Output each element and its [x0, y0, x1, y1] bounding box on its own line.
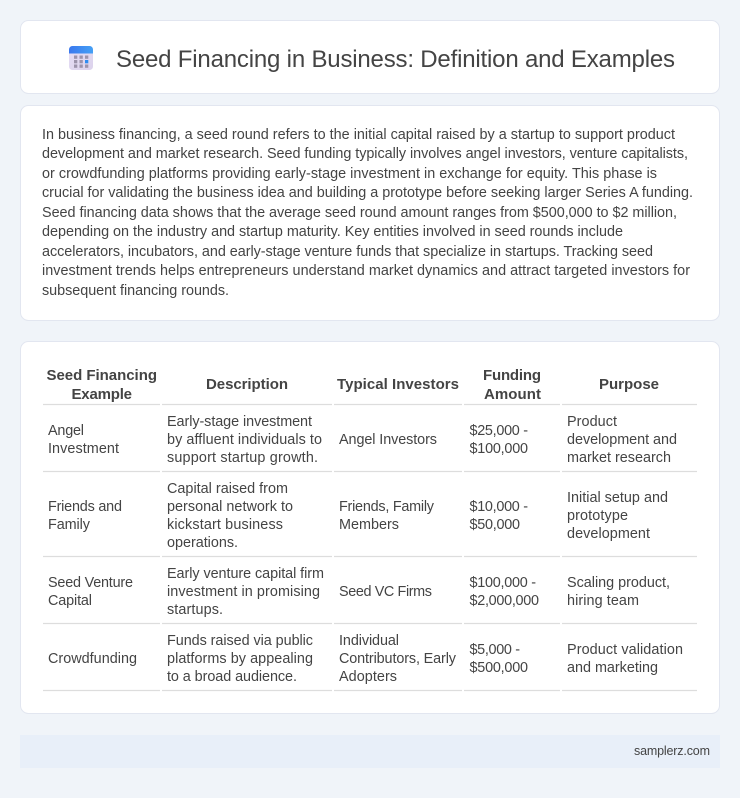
- table row: Angel Investment: $25,000 -: [470, 423, 528, 439]
- table row: Seed Venture Capital: Seed VC Firms: [339, 584, 432, 600]
- text block: introduction paragraph: or crowdfunding platforms providing early-stage investment in exchange for equity. This phase is: [42, 166, 657, 182]
- table row: Angel Investment: Early-stage investment: [167, 414, 312, 430]
- table row: Friends and Family: Capital raised from: [167, 481, 288, 497]
- footer source text: samplerz.com: [634, 744, 710, 758]
- table row: Friends and Family: Members: [339, 517, 399, 533]
- table row: Friends and Family: Friends and: [48, 499, 122, 515]
- table row: Friends and Family: personal network to: [167, 499, 293, 515]
- panel: header: [20, 20, 720, 94]
- table row: Friends and Family: kickstart business: [167, 517, 283, 533]
- table row: Crowdfunding: to a broad audience.: [167, 669, 297, 685]
- table header row: Amount: [484, 386, 541, 403]
- table row: Seed Venture Capital: hiring team: [567, 593, 639, 609]
- table row: Seed Venture Capital: startups.: [167, 602, 223, 618]
- table header row: Seed Financing: [46, 367, 157, 384]
- table row: Angel Investment: support startup growth.: [167, 450, 318, 466]
- table header row: Description: [206, 376, 288, 393]
- table row: Seed Venture Capital: $2,000,000: [470, 593, 539, 609]
- table row: Seed Venture Capital: Scaling product,: [567, 575, 670, 591]
- table row: Crowdfunding: $5,000 -: [470, 642, 520, 658]
- table row: Seed Venture Capital: $100,000 -: [470, 575, 536, 591]
- table row: Angel Investment: Product: [567, 414, 617, 430]
- text block: introduction paragraph: investment trends helps entrepreneurs understand market dynamics and attract targeted investors for: [42, 263, 690, 279]
- table row: Crowdfunding: and marketing: [567, 660, 658, 676]
- table row: Friends and Family: Friends, Family: [339, 499, 435, 515]
- table row: Angel Investment: development and: [567, 432, 677, 448]
- table row: Crowdfunding: Contributors, Early: [339, 651, 457, 667]
- table row: Angel Investment: by affluent individuals to: [167, 432, 322, 448]
- table row: Crowdfunding: $500,000: [470, 660, 528, 676]
- footer: [20, 735, 720, 768]
- panel: table: [20, 342, 720, 714]
- icon: calendar: [69, 46, 93, 70]
- table row: Angel Investment: Investment: [48, 441, 119, 457]
- text block: introduction paragraph: In business financing, a seed round refers to the initial capital raised by a startup to support product: [42, 127, 675, 143]
- table row: Friends and Family: prototype: [567, 508, 628, 524]
- table row: Friends and Family: development: [567, 526, 650, 542]
- table row: Seed Venture Capital: Seed Venture: [48, 575, 133, 591]
- table row: Angel Investment: $100,000: [470, 441, 528, 457]
- table row: Crowdfunding: [43, 633, 697, 690]
- table row: Seed Venture Capital: Early venture capital firm: [167, 566, 324, 582]
- title: Seed Financing in Business: Definition and Examples: [116, 46, 675, 73]
- text block: introduction paragraph: Seed financing data shows that the average seed round amount ranges from $500,000 to $2 million,: [42, 205, 677, 221]
- table row: Angel Investment: Angel Investors: [339, 432, 437, 448]
- panel: introduction: [20, 106, 720, 320]
- table row: Crowdfunding: platforms by appealing: [167, 651, 313, 667]
- table row: Angel Investment: Angel: [48, 423, 84, 439]
- table header row: Purpose: [599, 376, 659, 393]
- text block: introduction paragraph: subsequent financing rounds.: [42, 283, 229, 299]
- table row: Seed Venture Capital: Capital: [48, 593, 92, 609]
- table row: Angel Investment: [43, 414, 697, 472]
- text block: introduction paragraph: accelerators, incubators, and early-stage venture funds that specialize in startups. Tracking seed: [42, 244, 653, 260]
- table header row: Typical Investors: [337, 376, 459, 393]
- text block: introduction paragraph: crucial for validating the business idea and building a prototype before seeking larger Series A funding.: [42, 185, 693, 201]
- table header row: Example: [72, 386, 132, 403]
- table row: Friends and Family: [43, 481, 697, 556]
- table row: Friends and Family: $50,000: [470, 517, 520, 533]
- text block: introduction paragraph: development and market research. Seed funding typically involves angel investors, venture capitalists,: [42, 146, 688, 162]
- table row: Angel Investment: market research: [567, 450, 671, 466]
- table row: Crowdfunding: Funds raised via public: [167, 633, 313, 649]
- table row: Friends and Family: operations.: [167, 535, 238, 551]
- table row: Friends and Family: Initial setup and: [567, 490, 668, 506]
- table row: Crowdfunding: Individual: [339, 633, 399, 649]
- table row: Crowdfunding: Crowdfunding: [48, 651, 137, 667]
- table row: Seed Venture Capital: investment in promising: [167, 584, 320, 600]
- table row: Friends and Family: $10,000 -: [470, 499, 528, 515]
- table header row: [43, 367, 697, 404]
- table row: Friends and Family: Family: [48, 517, 91, 533]
- text block: introduction paragraph: [42, 127, 693, 299]
- table row: Crowdfunding: Product validation: [567, 642, 683, 658]
- table row: Seed Venture Capital: [43, 566, 697, 624]
- table header row: Funding: [483, 367, 541, 384]
- table row: Crowdfunding: Adopters: [339, 669, 397, 685]
- text block: introduction paragraph: depending on the industry and startup maturity. Key entities involved in seed rounds include: [42, 224, 623, 240]
